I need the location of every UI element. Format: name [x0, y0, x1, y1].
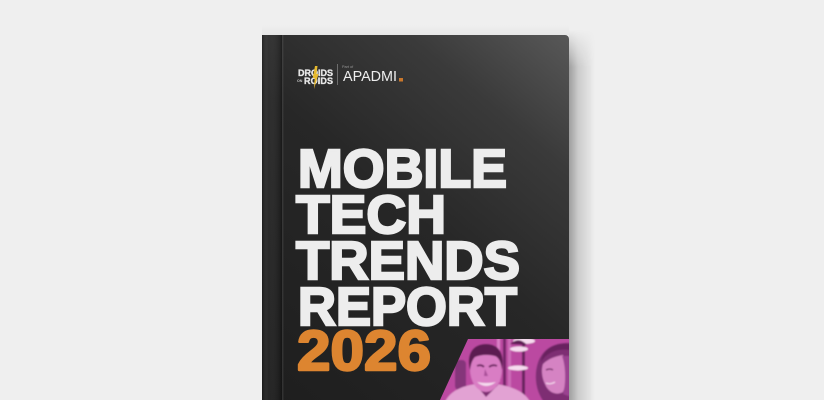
logo: Droids on Roids: ON [297, 79, 303, 83]
title: MOBILE [298, 139, 507, 199]
logo: Part of Apadmi: APADMI [343, 68, 397, 85]
year: 2026 [297, 319, 431, 383]
logo divider [337, 64, 338, 85]
logo: Droids on Roids [297, 66, 333, 89]
man [444, 344, 531, 400]
book spine [262, 35, 284, 400]
logo: Droids on Roids: ROIDS [304, 76, 333, 86]
book shadow [569, 34, 591, 400]
title: REPORT [298, 277, 517, 337]
logo: Droids on Roids: DROIDS [298, 68, 333, 78]
logo: Part of Apadmi: Part of [342, 65, 354, 69]
icon: lightning bolt [313, 66, 318, 89]
icon: orange square [399, 78, 403, 82]
report cover mockup [262, 34, 591, 400]
photo: two colleagues in magenta duotone [440, 339, 569, 400]
woman [536, 343, 574, 400]
title: TECH [296, 185, 446, 245]
title [296, 139, 520, 337]
book cover [262, 35, 569, 400]
title: TRENDS [296, 231, 520, 291]
